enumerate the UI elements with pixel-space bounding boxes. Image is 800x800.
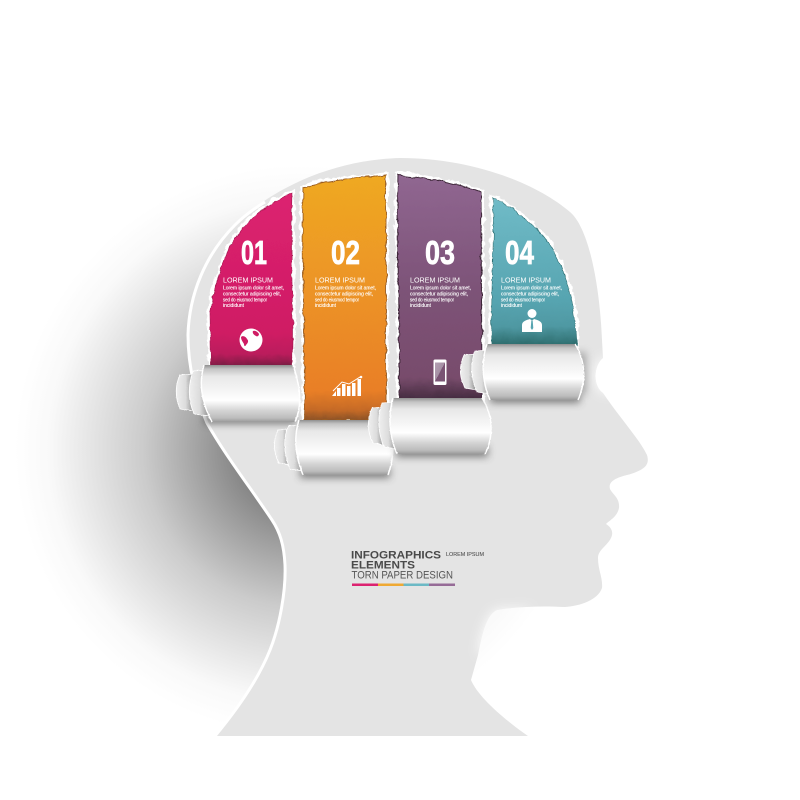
text block 1: Lorem ipsum dolor sit amet, xyxy=(223,286,284,292)
icon: person xyxy=(522,309,542,332)
text block 3: consectetur adipiscing elit, xyxy=(410,292,468,298)
tag: lorem ipsum: LOREM IPSUM xyxy=(446,552,484,558)
text block 4: incididunt xyxy=(501,303,523,309)
text block 1 xyxy=(223,276,284,309)
text block 4: LOREM IPSUM xyxy=(501,276,551,284)
text block 1: consectetur adipiscing elit, xyxy=(223,292,281,298)
head silhouette xyxy=(188,158,648,736)
text block 4: Lorem ipsum dolor sit amet, xyxy=(501,286,562,292)
text block 1: sed do eiusmod tempor xyxy=(223,298,267,304)
number 03: 03 xyxy=(425,234,455,271)
text block 2: Lorem ipsum dolor sit amet, xyxy=(315,286,376,292)
text block 3: LOREM IPSUM xyxy=(410,276,460,284)
text block 2: sed do eiusmod tempor xyxy=(315,298,359,304)
panel 1: pink xyxy=(210,193,293,368)
text block 2: LOREM IPSUM xyxy=(315,276,365,284)
colour bar xyxy=(352,584,455,586)
panel 4: teal xyxy=(492,198,577,346)
number 01: 01 xyxy=(241,234,267,271)
title block xyxy=(351,550,484,586)
panel 2: orange xyxy=(303,175,386,420)
panel 3: purple xyxy=(398,175,482,400)
paper roll 4 xyxy=(460,344,586,403)
subheading: torn paper design: TORN PAPER DESIGN xyxy=(352,570,453,582)
text block 3 xyxy=(410,276,471,309)
text block 3: sed do eiusmod tempor xyxy=(410,298,454,304)
text block 4 xyxy=(501,276,562,309)
text block 2 xyxy=(315,276,376,309)
number 02: 02 xyxy=(331,234,360,271)
text block 2: incididunt xyxy=(315,303,337,309)
text block 4: consectetur adipiscing elit, xyxy=(501,292,559,298)
text block 1: LOREM IPSUM xyxy=(223,276,273,284)
paper roll 1 xyxy=(176,365,300,424)
icon: rising bar chart xyxy=(332,376,362,396)
icon: globe xyxy=(240,328,262,352)
heading: elements: ELEMENTS xyxy=(351,560,415,572)
number 04: 04 xyxy=(505,234,535,271)
text block 4: sed do eiusmod tempor xyxy=(501,298,545,304)
text block 3: Lorem ipsum dolor sit amet, xyxy=(410,286,471,292)
text block 1: incididunt xyxy=(223,303,245,309)
paper roll 2 xyxy=(274,420,393,478)
background drop shadow xyxy=(0,150,600,770)
icon: smartphone xyxy=(434,360,446,385)
paper roll 3 xyxy=(368,398,491,457)
text block 3: incididunt xyxy=(410,303,432,309)
heading: infographics: INFOGRAPHICS xyxy=(351,550,441,562)
text block 2: consectetur adipiscing elit, xyxy=(315,292,373,298)
